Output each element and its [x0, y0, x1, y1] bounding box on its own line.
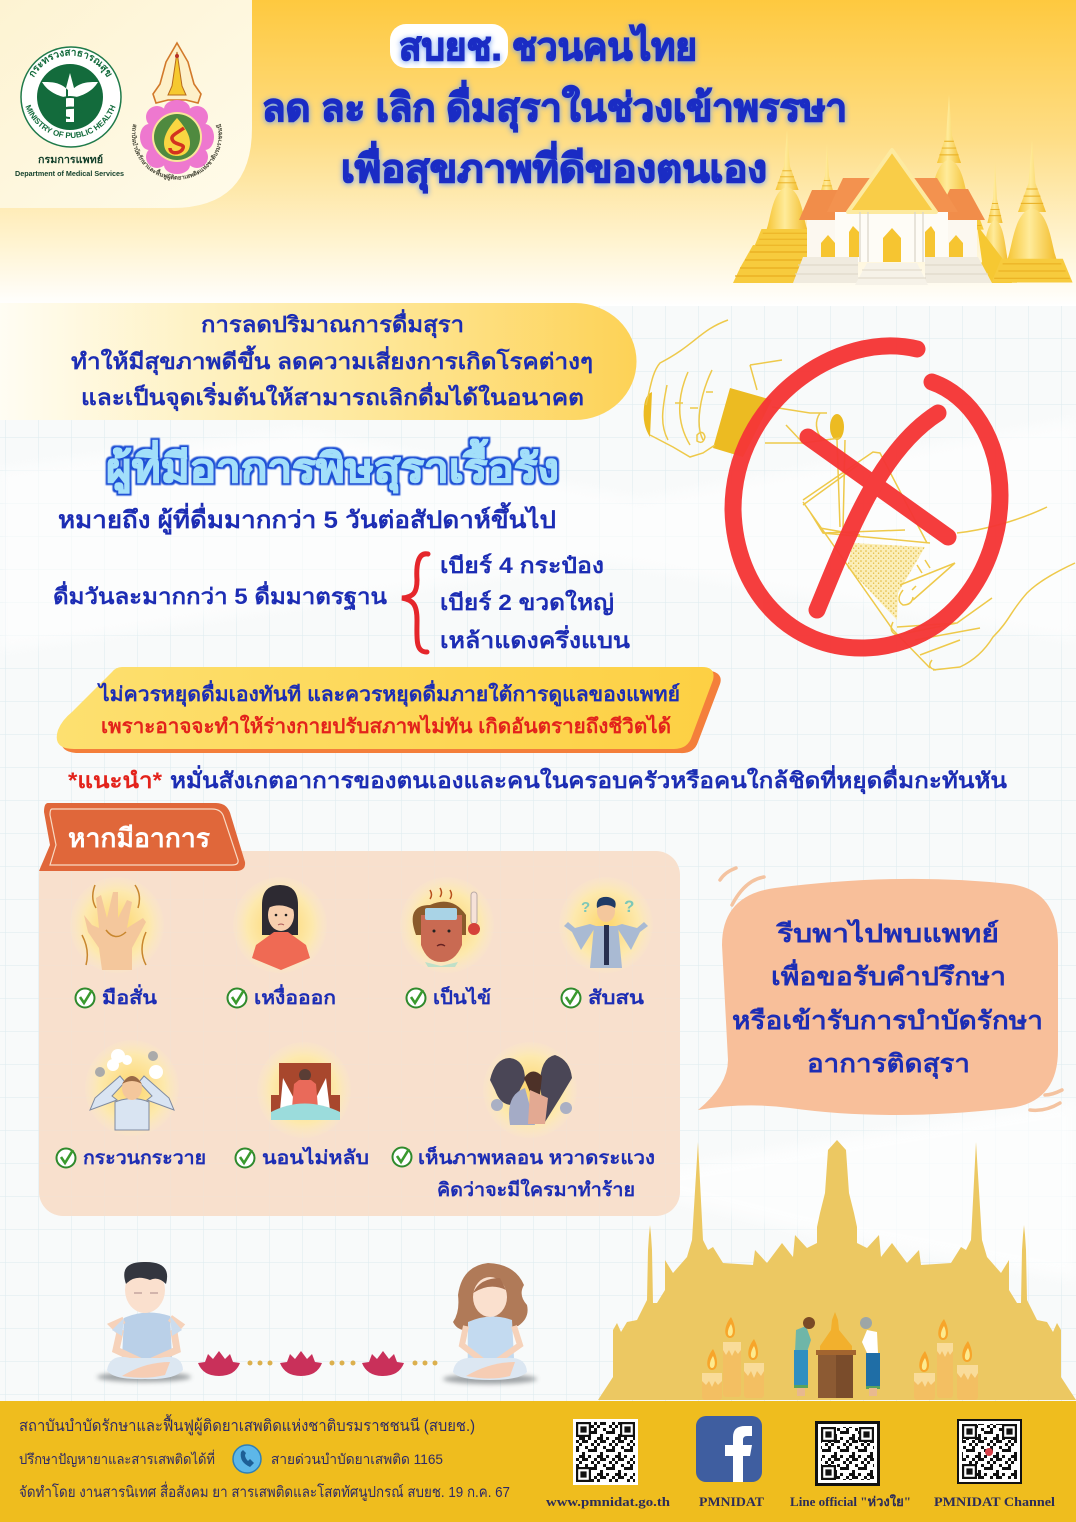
logo: PMNIDAT institute: สถาบันบำบัดรักษาและฟื้นฟูผู้ติดยาเสพติดแห่งชาติบรมราชชนนี	[132, 124, 222, 181]
intro pill: และเป็นจุดเริ่มต้นให้สามารถเลิกดื่มได้ในอนาคต	[81, 381, 584, 412]
symptom: hallucination: คิดว่าจะมีใครมาทำร้าย	[437, 1178, 635, 1201]
QR code: website	[573, 1419, 638, 1485]
title: ลด ละ เลิก ดื่มสุราในช่วงเข้าพรรษา	[262, 80, 847, 132]
footer text	[19, 1414, 510, 1501]
illustration: meditating girl	[443, 1263, 537, 1384]
icon: phone hotline	[233, 1445, 261, 1473]
intro pill: การลดปริมาณการดื่มสุรา	[201, 308, 464, 339]
panel: symptoms	[39, 803, 680, 1216]
logo: Ministry of Public Health: กรมการแพทย์	[38, 154, 103, 166]
speech bubble: see a doctor: อาการติดสุรา	[807, 1050, 970, 1080]
footer link labels: Line official "ห่วงใย"	[790, 1493, 911, 1509]
warning banner: เพราะอาจจะทำให้ร่างกายปรับสภาพไม่ทัน เกิดอันตรายถึงชีวิตได้	[101, 714, 671, 738]
speech bubble: see a doctor: หรือเข้ารับการบำบัดรักษา	[732, 1007, 1043, 1035]
tab: if symptoms: หากมีอาการ	[68, 823, 210, 853]
symptom: restlessness: กระวนกระวาย	[83, 1148, 206, 1169]
logo: PMNIDAT institute	[132, 42, 222, 181]
title	[262, 24, 847, 193]
warning banner: ไม่ควรหยุดดื่มเองทันที และควรหยุดดื่มภายใต้การดูแลของแพทย์	[97, 679, 680, 708]
symptom: confusion: ?	[624, 897, 634, 916]
drinks definition: เบียร์ 2 ขวดใหญ่	[440, 589, 614, 616]
logo: Ministry of Public Health: MINISTRY OF PUBLIC HEALTH	[26, 104, 116, 138]
header band	[0, 0, 1076, 306]
illustration: meditating boy	[97, 1262, 191, 1382]
footer link labels: www.pmnidat.go.th	[546, 1494, 671, 1509]
advice note: หมั่นสังเกตอาการของตนเองและคนในครอบครัวหรือคนใกล้ชิดที่หยุดดื่มกะทันหัน	[170, 764, 1007, 795]
speech bubble: see a doctor: รีบพาไปพบแพทย์	[775, 918, 999, 948]
symptom: sweating: เหงื่อออก	[254, 984, 336, 1009]
footer text: สถาบันบำบัดรักษาและฟื้นฟูผู้ติดยาเสพติดแห่งชาติบรมราชชนนี (สบยช.)	[19, 1414, 475, 1436]
title: เพื่อสุขภาพที่ดีของตนเอง	[341, 141, 767, 193]
footer text: สายด่วนบำบัดยาเสพติด 1165	[271, 1451, 443, 1467]
advice note: *แนะนำ*	[68, 768, 162, 793]
illustration: lotus chain	[198, 1351, 438, 1376]
tab: if symptoms	[39, 803, 245, 871]
footer link labels: PMNIDAT Channel	[934, 1494, 1055, 1509]
symptom: confusion	[559, 877, 653, 1009]
drinks definition: ดื่มวันละมากกว่า 5 ดื่มมาตรฐาน	[53, 580, 387, 611]
illustration: temple silhouette	[598, 1140, 1076, 1400]
logo: Ministry of Public Health: Department of Medical Services	[15, 171, 124, 178]
drinks definition	[53, 553, 630, 653]
intro pill: ทำให้มีสุขภาพดีขึ้น ลดความเสี่ยงการเกิดโรคต่างๆ	[71, 345, 593, 376]
illustration: pouring alcohol with prohibition sign	[644, 320, 1075, 670]
icon: Facebook	[696, 1416, 762, 1482]
advice note	[68, 764, 1007, 795]
logo: Ministry of Public Health: กระทรวงสาธารณสุข	[30, 49, 112, 78]
logo panel	[0, 0, 252, 208]
symptom: fever: เป็นไข้	[433, 985, 491, 1009]
symptom: trembling hands: มือสั่น	[102, 984, 157, 1009]
QR code: Line official	[815, 1421, 880, 1486]
drinks definition: เหล้าแดงครึ่งแบน	[440, 624, 630, 653]
symptom: fever	[400, 877, 494, 1009]
footer	[0, 1401, 1076, 1522]
symptom: sweating	[228, 877, 336, 1009]
symptom: insomnia: นอนไม่หลับ	[262, 1146, 369, 1169]
speech bubble: see a doctor: เพื่อขอรับคำปรึกษา	[771, 959, 1006, 991]
symptom: trembling hands	[70, 877, 164, 1009]
logo: Ministry of Public Health	[15, 46, 124, 178]
footer text: ปรึกษาปัญหายาและสารเสพติดได้ที่	[19, 1450, 215, 1467]
intro pill	[0, 303, 637, 420]
definition text: หมายถึง ผู้ที่ดื่มมากกว่า 5 วันต่อสัปดาห์ขึ้นไป	[58, 501, 556, 535]
warning banner	[57, 667, 721, 753]
footer text: จัดทำโดย งานสารนิเทศ สื่อสังคม ยา สารเสพติดและโสตทัศนูปกรณ์ สบยช. 19 ก.ค. 67	[19, 1481, 510, 1501]
symptom: insomnia	[236, 1042, 369, 1169]
symptom: hallucination: เห็นภาพหลอน หวาดระแวง	[418, 1145, 655, 1169]
QR code: YouTube channel	[957, 1419, 1022, 1484]
heading: chronic alcohol toxicity: ผู้ที่มีอาการพิษสุราเรื้อรัง	[106, 439, 559, 494]
candles and worshippers	[702, 1312, 978, 1400]
symptom: confusion: ?	[581, 899, 590, 916]
drinks definition: เบียร์ 4 กระป๋อง	[440, 553, 604, 578]
symptom: confusion: สับสน	[588, 988, 644, 1009]
title: สบยช. ชวนคนไทย	[399, 24, 697, 69]
footer link labels	[546, 1493, 1055, 1509]
speech bubble: see a doctor	[698, 868, 1062, 1115]
symptom: hallucination	[392, 1042, 655, 1201]
footer link labels: PMNIDAT	[699, 1494, 764, 1509]
symptom: restlessness	[56, 1040, 206, 1169]
illustration: golden temple	[733, 95, 1073, 285]
